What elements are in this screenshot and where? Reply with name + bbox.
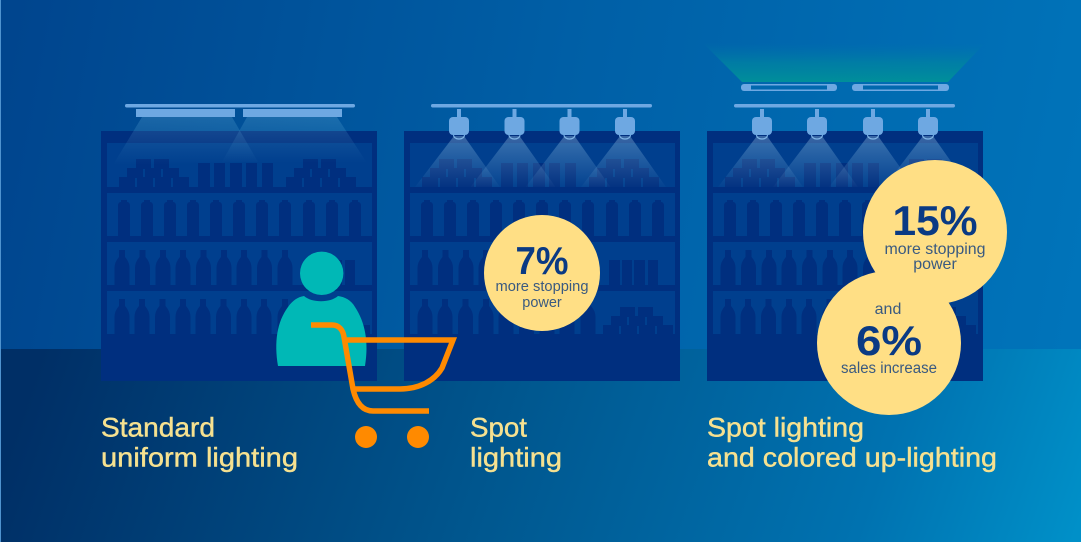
- icon: shopper: [276, 252, 367, 366]
- spot beams: [415, 136, 666, 187]
- caption: and colored up-lighting: [707, 442, 997, 472]
- spot lamps: [449, 109, 635, 139]
- caption: Standard: [101, 412, 215, 442]
- callout: 7%: [484, 215, 600, 331]
- track: [734, 104, 955, 108]
- floor: [0, 349, 1081, 542]
- light beams: [113, 117, 367, 165]
- up-light fixtures: [741, 84, 949, 91]
- callout: 7%: 7%: [516, 240, 568, 283]
- panel: spot lighting: [404, 104, 680, 472]
- caption: lighting: [470, 442, 562, 472]
- track: [431, 104, 652, 108]
- callout: 15%: more stopping: [884, 241, 986, 258]
- spot beams: [718, 136, 969, 187]
- panel: standard uniform lighting: [101, 104, 377, 472]
- panel: spot lighting and colored up-lighting: [703, 43, 1007, 472]
- callout: 15%: 15%: [892, 197, 978, 244]
- caption: [101, 412, 298, 472]
- callout: 7%: more stopping: [496, 279, 588, 295]
- background wall: [0, 0, 1081, 349]
- shelf: [101, 131, 377, 381]
- shelf: [707, 131, 983, 381]
- caption: Spot lighting: [707, 412, 864, 442]
- caption: Spot: [470, 412, 528, 442]
- caption: uniform lighting: [101, 442, 298, 472]
- callout: 6%: sales increase: [841, 360, 937, 377]
- ceiling light fixture: [125, 104, 355, 117]
- left edge line: [0, 0, 1, 542]
- callout: 7%: power: [522, 295, 562, 311]
- caption: [707, 412, 997, 472]
- caption: [470, 412, 562, 472]
- callout: 6%: and: [875, 301, 901, 318]
- spot lamps: [752, 109, 938, 139]
- shelf: [404, 131, 680, 381]
- callout: 6%: [817, 271, 961, 415]
- callout: 6%: 6%: [856, 317, 922, 364]
- callout: 15%: power: [913, 256, 957, 273]
- icon: shopping cart: [311, 325, 453, 448]
- callout: 15%: [863, 160, 1007, 304]
- up-light glow: [703, 43, 985, 82]
